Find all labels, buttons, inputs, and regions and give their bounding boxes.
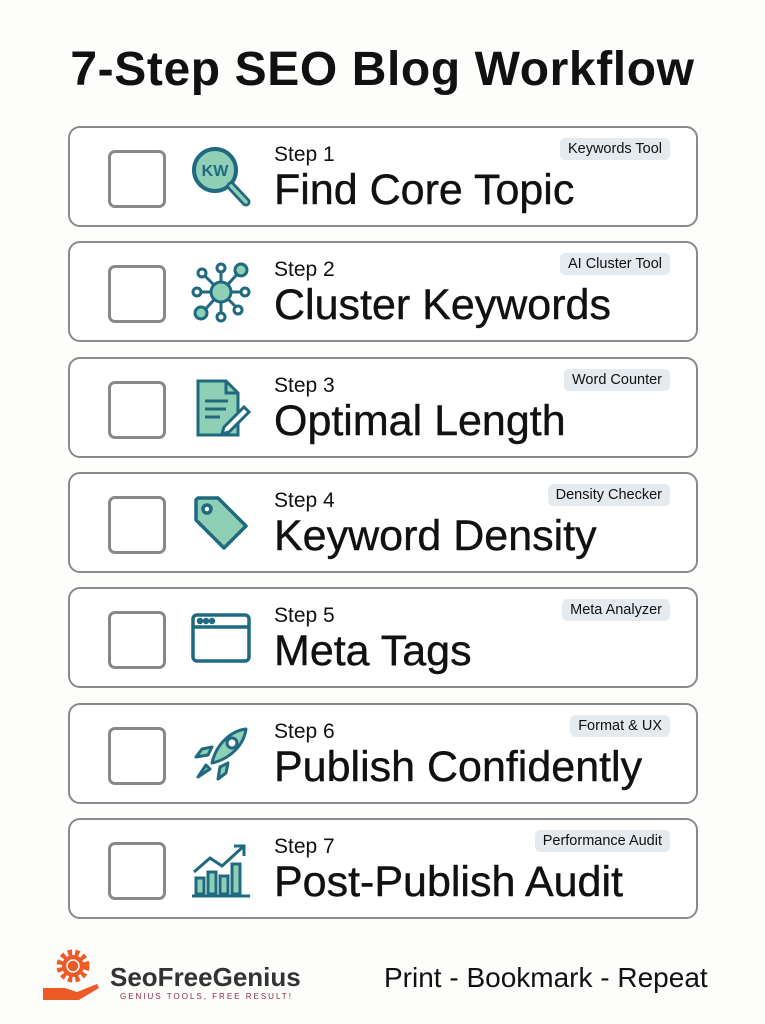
tag	[560, 253, 670, 275]
card: step 4: Step 4	[274, 489, 335, 512]
icon: rocket	[194, 728, 248, 781]
card: step 4: Keyword Density	[274, 512, 597, 560]
card: step 2: Step 2	[274, 258, 335, 281]
card: step 6	[68, 703, 698, 804]
tag: Word Counter	[572, 372, 662, 388]
tag: Meta Analyzer	[570, 602, 662, 618]
tag: Keywords Tool	[568, 141, 662, 157]
card: step 3: Step 3	[274, 374, 335, 397]
card: step 3	[68, 357, 698, 458]
logo: GENIUS TOOLS, FREE RESULT!	[120, 992, 293, 1001]
icon: KW magnifier: KW	[202, 163, 229, 180]
icon: browser window	[191, 613, 251, 663]
icon: gear hand	[43, 950, 99, 1000]
icon: KW magnifier	[192, 147, 250, 206]
card: step 7	[68, 818, 698, 919]
icon: tag	[194, 496, 248, 550]
tag	[562, 599, 670, 621]
card: step 5	[68, 587, 698, 688]
card: step 3: Optimal Length	[274, 397, 566, 445]
logo: SeoFreeGenius	[110, 962, 301, 992]
icon: cluster	[192, 262, 250, 322]
tag: Format & UX	[578, 718, 662, 734]
card: step 1: Find Core Topic	[274, 166, 574, 214]
card: step 6: Step 6	[274, 720, 335, 743]
card: step 2: Cluster Keywords	[274, 281, 611, 329]
card: step 5: Step 5	[274, 604, 335, 627]
icon: growth chart	[192, 844, 250, 898]
title: 7-Step SEO Blog Workflow	[70, 43, 695, 96]
card: step 1	[68, 126, 698, 227]
tag	[570, 715, 670, 737]
tag: Density Checker	[556, 487, 662, 503]
tag	[535, 830, 670, 852]
card: step 4	[68, 472, 698, 573]
logo	[43, 950, 301, 1001]
tag: AI Cluster Tool	[568, 256, 662, 272]
card: step 7: Step 7	[274, 835, 335, 858]
tag: Performance Audit	[543, 833, 662, 849]
tag	[564, 369, 670, 391]
icon: document pen	[196, 380, 251, 436]
card: step 5: Meta Tags	[274, 627, 472, 675]
tag	[560, 138, 670, 160]
tag	[548, 484, 670, 506]
card: step 1: Step 1	[274, 143, 335, 166]
footer tagline: Print - Bookmark - Repeat	[384, 962, 708, 993]
card: step 2	[68, 241, 698, 342]
card: step 6: Publish Confidently	[274, 743, 642, 791]
card: step 7: Post-Publish Audit	[274, 858, 623, 906]
